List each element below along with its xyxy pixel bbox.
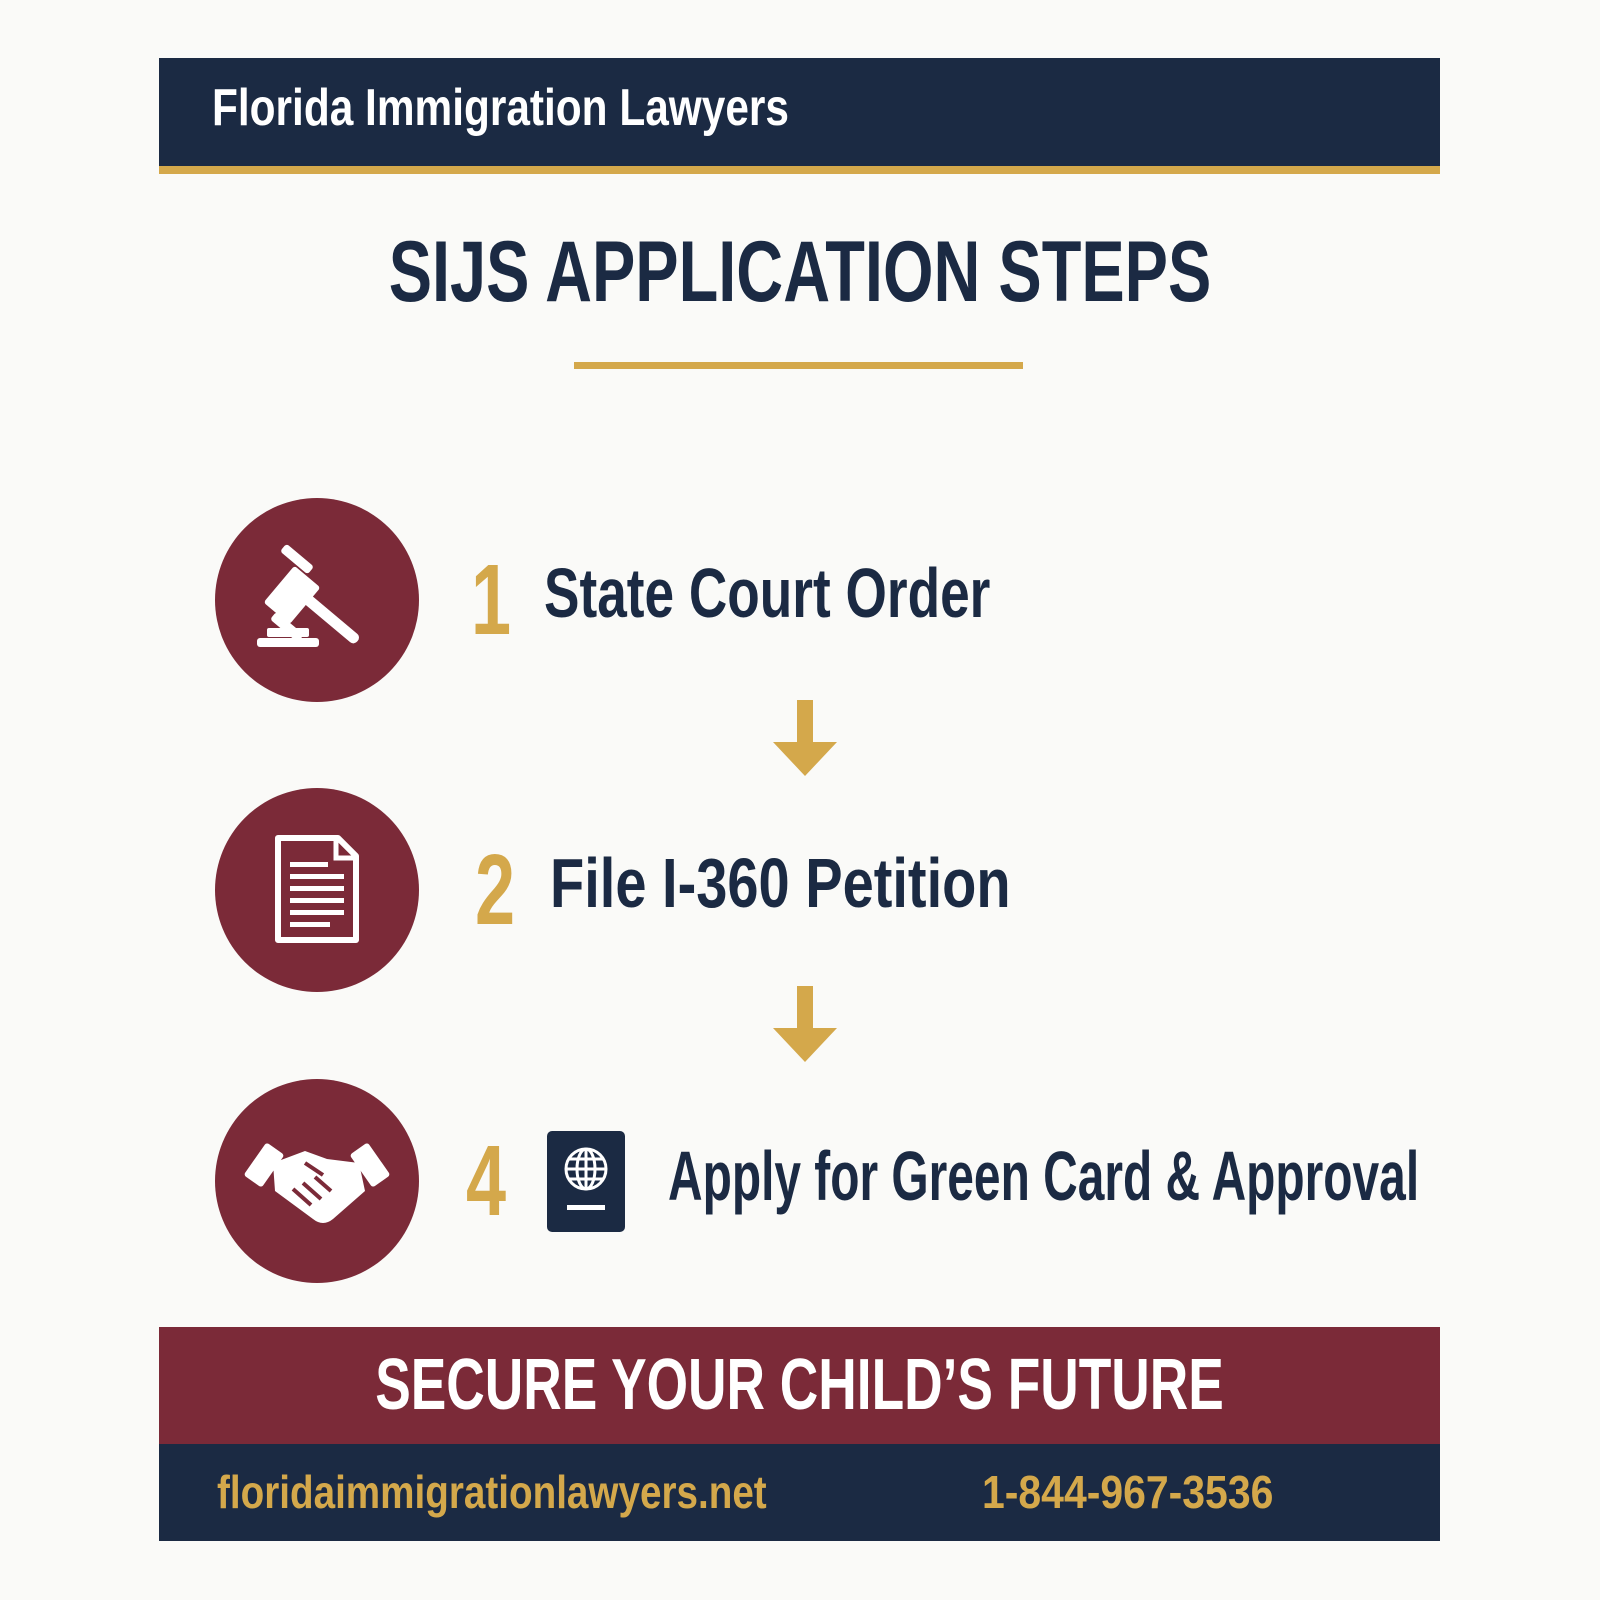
website: floridaimmigrationlawyers.net — [217, 1466, 767, 1518]
header bar — [159, 58, 1440, 174]
step 1 — [215, 498, 990, 702]
icon: handshake — [215, 1079, 419, 1283]
step text: Apply for Green Card & Approval — [668, 1137, 1419, 1215]
step text: State Court Order — [544, 554, 990, 632]
arrow 2 — [773, 986, 837, 1062]
arrow 1 — [773, 700, 837, 776]
icon: gavel — [215, 498, 419, 702]
phone: 1-844-967-3536 — [982, 1466, 1273, 1518]
step 2 — [215, 788, 1011, 992]
banner text: SECURE YOUR CHILD’S FUTURE — [375, 1345, 1224, 1425]
icon: passport — [547, 1131, 625, 1232]
step text: File I-360 Petition — [550, 844, 1011, 922]
banner: call to action — [159, 1327, 1440, 1444]
number 2: 2 — [475, 834, 515, 946]
number 1: 1 — [471, 544, 511, 656]
header text: Florida Immigration Lawyers — [212, 79, 789, 137]
title: SIJS APPLICATION STEPS — [389, 224, 1211, 320]
step 4 — [215, 1079, 1419, 1283]
number 4: 4 — [466, 1125, 506, 1237]
footer — [159, 1444, 1440, 1541]
icon: document — [215, 788, 419, 992]
title underline — [574, 362, 1023, 369]
